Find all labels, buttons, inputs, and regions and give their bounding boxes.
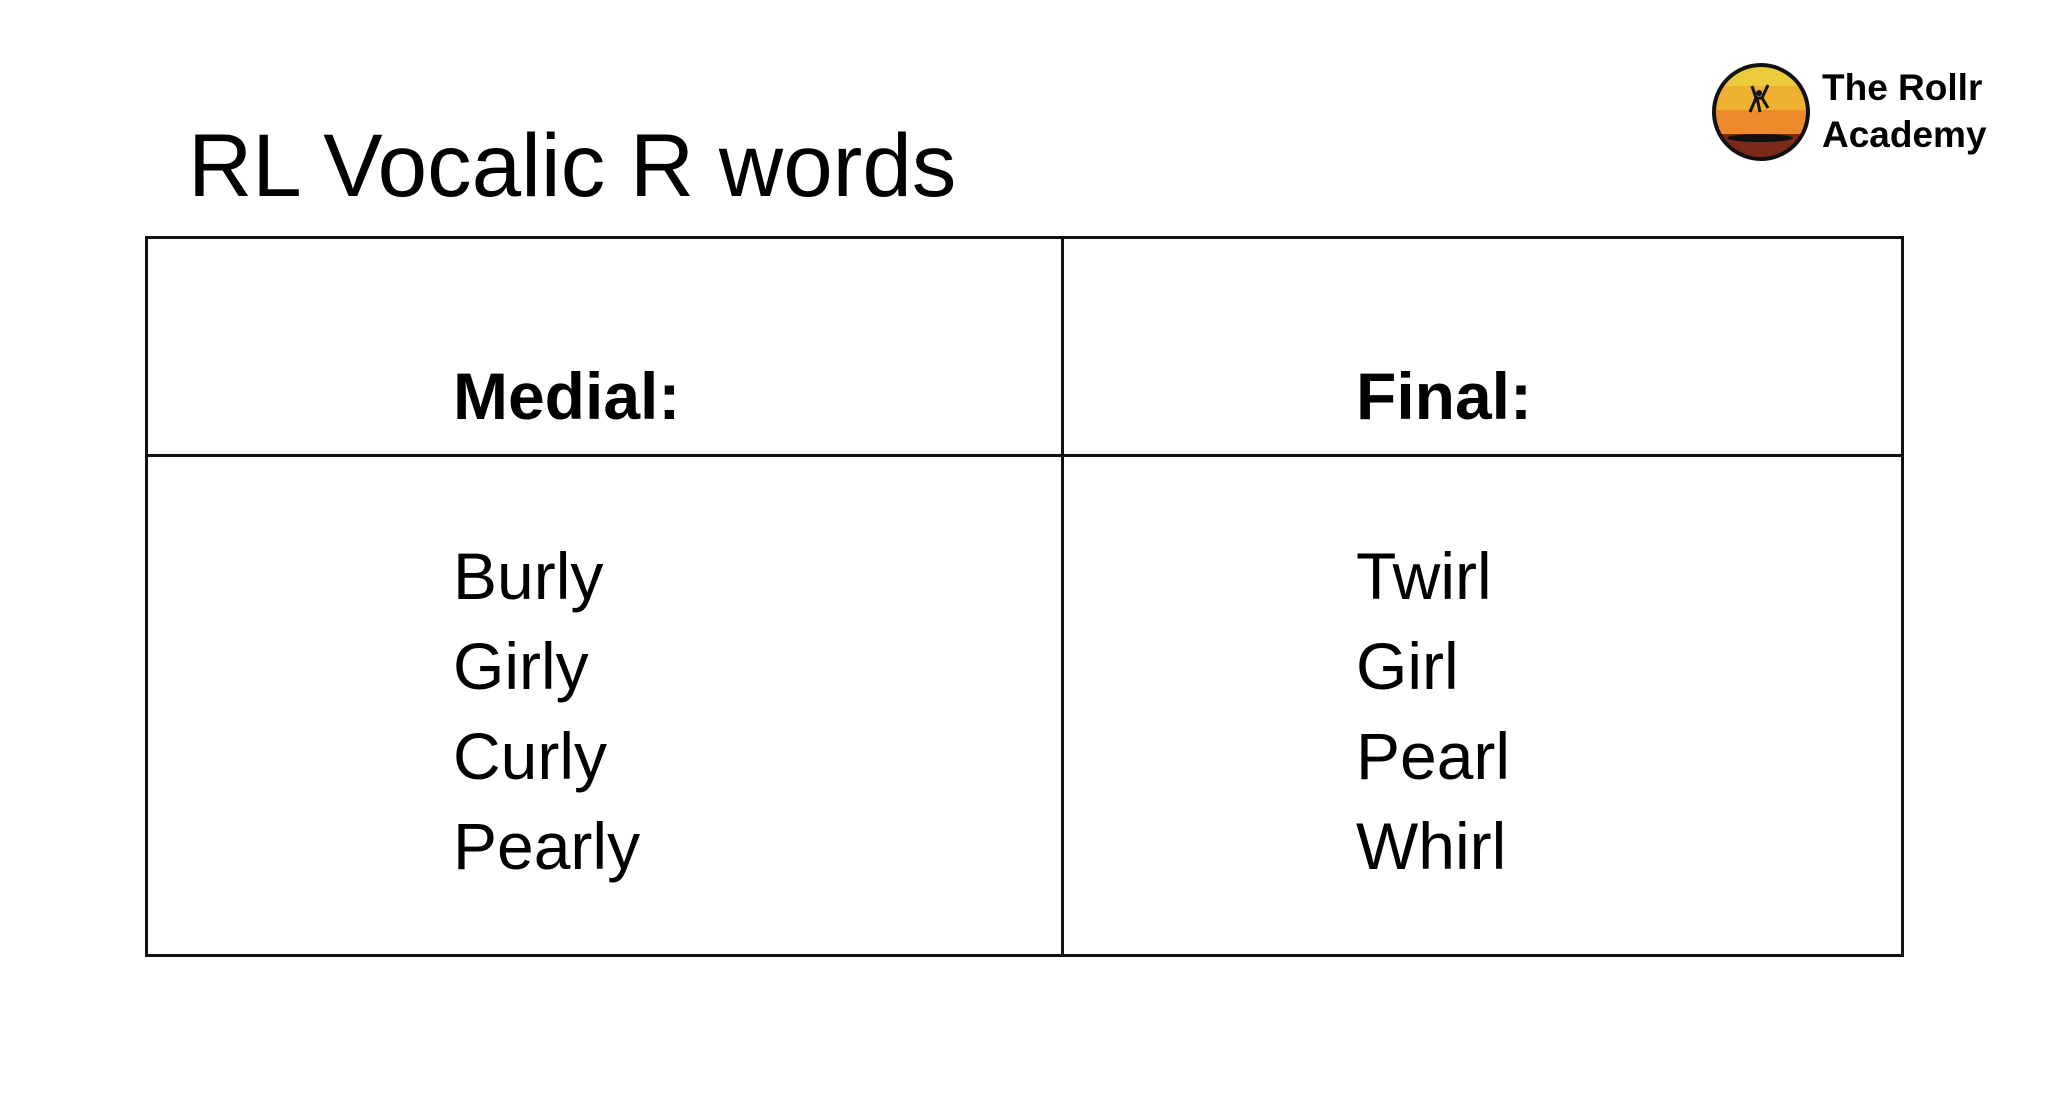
- logo text: Academy: [1822, 114, 1987, 155]
- header divider: [148, 454, 1901, 457]
- list: final words: [1356, 539, 1510, 883]
- list: final words: Pearl: [1356, 719, 1510, 793]
- list: medial words: Curly: [453, 719, 607, 793]
- list: medial words: Pearly: [453, 809, 640, 883]
- list: final words: Girl: [1356, 629, 1459, 703]
- list: final words: Whirl: [1356, 809, 1506, 883]
- logo text: The Rollr: [1822, 67, 1982, 108]
- table: [145, 236, 1904, 957]
- header: Final: Final:: [1356, 359, 1532, 433]
- icon: trampoline sunset circle: [1712, 63, 1810, 161]
- logo: [1712, 63, 1987, 161]
- column divider: [1061, 239, 1064, 954]
- list: medial words: Burly: [453, 539, 603, 613]
- header: Medial: Medial:: [453, 359, 680, 433]
- list: final words: Twirl: [1356, 539, 1492, 613]
- title: RL Vocalic R words: [188, 115, 956, 215]
- list: medial words: [453, 539, 640, 883]
- logo text: [1822, 67, 1987, 155]
- list: medial words: Girly: [453, 629, 589, 703]
